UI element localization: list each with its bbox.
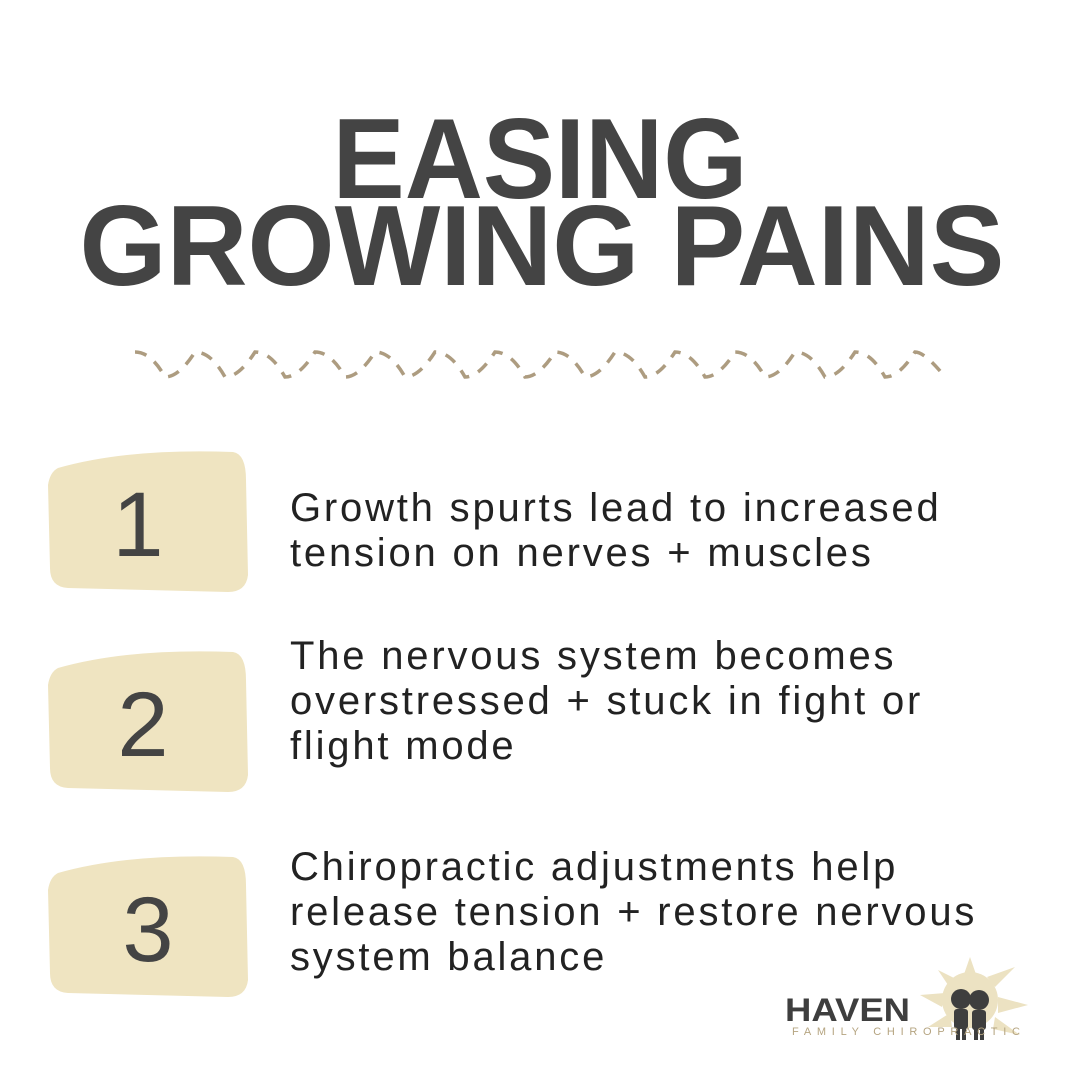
logo: HAVEN	[785, 992, 910, 1028]
icon: kids	[951, 989, 989, 1040]
item 2 text: flight mode	[290, 724, 516, 768]
item 1 text: tension on nerves + muscles	[290, 531, 874, 575]
item 1 text	[290, 486, 942, 575]
item 2 text: overstressed + stuck in fight or	[290, 679, 923, 723]
item 3 badge: 3	[122, 879, 174, 981]
title: EASING	[332, 96, 748, 223]
item 2 text	[290, 634, 923, 768]
logo: FAMILY CHIROPRACTIC	[792, 1026, 1020, 1038]
item 2 badge: 2	[117, 674, 169, 776]
icon: sun	[920, 957, 1028, 1035]
title	[80, 96, 1004, 300]
item 2 badge	[48, 651, 248, 792]
item 1 text: Growth spurts lead to increased	[290, 486, 942, 530]
item 3 text	[290, 845, 977, 979]
wavy divider	[135, 350, 942, 379]
item 1 badge	[48, 451, 248, 592]
item 3 text: Chiropractic adjustments help	[290, 845, 898, 889]
item 3 text: system balance	[290, 935, 607, 979]
item 3 text: release tension + restore nervous	[290, 890, 977, 934]
item 1 badge: 1	[112, 474, 164, 576]
logo	[785, 957, 1028, 1040]
item 2 text: The nervous system becomes	[290, 634, 896, 678]
item 3 badge	[48, 856, 248, 997]
